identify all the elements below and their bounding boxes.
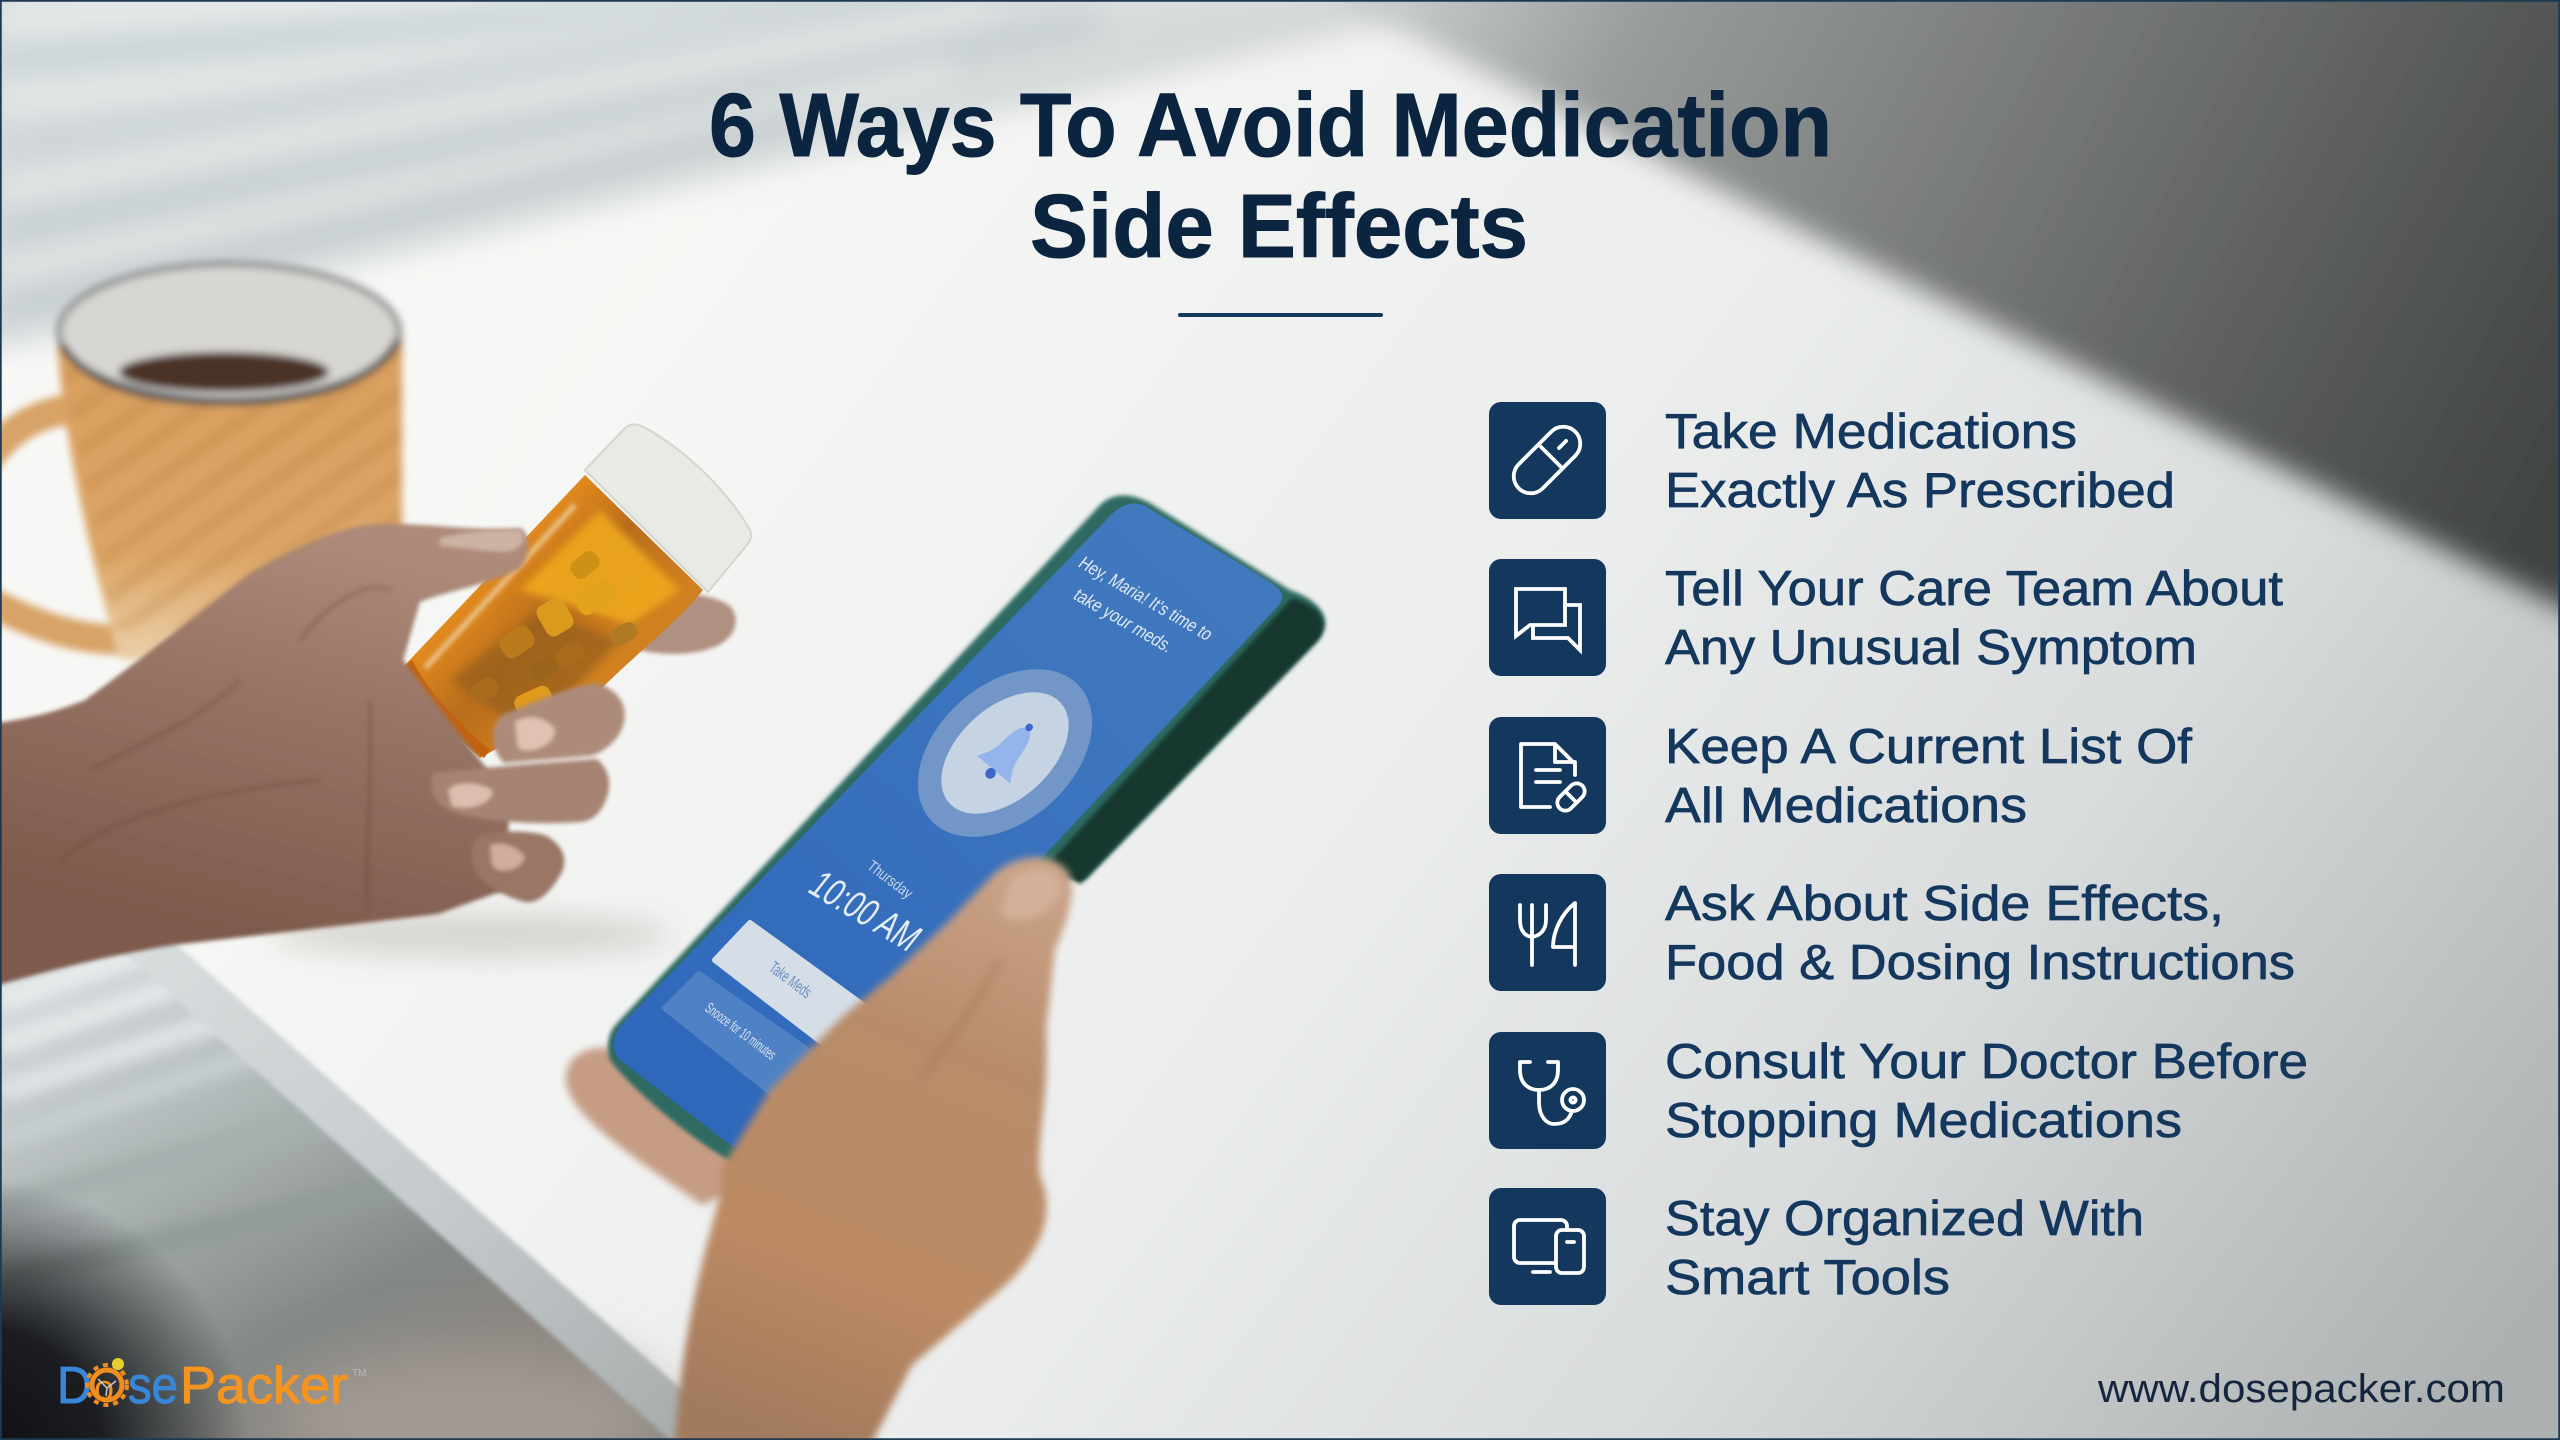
photo: right hand holding phone <box>674 857 1072 1440</box>
logo: DosePacker: Packer <box>180 1357 348 1415</box>
list item 5: consult your doctor <box>1489 1032 2308 1149</box>
snooze button <box>665 974 813 1095</box>
phone dark side <box>1050 598 1323 884</box>
snooze button: Snooze for 10 minutes <box>702 1000 779 1064</box>
item text: Stay Organized With <box>1665 1192 2144 1246</box>
logo: DosePacker: TM <box>352 1368 366 1379</box>
list item 6: stay organized <box>1489 1188 2144 1305</box>
icon: stethoscope <box>1489 1032 1606 1149</box>
icon: capsule <box>1489 402 1606 519</box>
take meds button <box>715 923 867 1047</box>
icon: document with pill <box>1489 717 1606 834</box>
icon: chat bubbles <box>1489 559 1606 676</box>
item text <box>1665 1035 2308 1148</box>
logo: DosePacker: se <box>128 1357 178 1415</box>
bell alert circle <box>885 636 1125 870</box>
bell icon <box>970 710 1048 792</box>
pill bottle body <box>403 475 703 758</box>
title: Side Effects <box>1030 177 1528 277</box>
list item 3: keep a current list <box>1489 717 2192 834</box>
item text <box>1665 720 2192 833</box>
item text: Take Medications <box>1665 405 2077 459</box>
pill bottle cap <box>585 424 751 592</box>
item text: Food & Dosing Instructions <box>1665 936 2295 990</box>
curled fingers <box>431 530 625 902</box>
item text: Exactly As Prescribed <box>1665 464 2175 518</box>
website url: www.dosepacker.com <box>2097 1367 2505 1411</box>
item text: Any Unusual Symptom <box>1665 621 2197 675</box>
screen day label: Thursday <box>864 858 916 902</box>
photo: smartphone with reminder app <box>608 495 1325 1165</box>
photo: coffee mug <box>0 264 410 660</box>
list item 1: take medications <box>1489 402 2175 519</box>
phone body <box>608 495 1325 1165</box>
background: below table with blind reflections, bottom left <box>2 954 679 1438</box>
finger behind bottle <box>630 594 736 654</box>
item text: Ask About Side Effects, <box>1665 877 2224 931</box>
logo gear with clock: o <box>94 1367 114 1408</box>
mug front rim <box>62 340 398 402</box>
background: dark wall, top right <box>1340 0 2560 640</box>
table front edge <box>115 943 745 1440</box>
item text <box>1665 1192 2144 1305</box>
icon: fork and knife <box>1489 874 1606 991</box>
hand and thumb <box>674 857 1072 1440</box>
screen reminder message: Hey, Maria! It's time to <box>1074 553 1217 645</box>
hand palm and index finger <box>0 524 528 990</box>
mug body <box>50 330 410 660</box>
photo: left hand holding pill bottle <box>0 424 751 990</box>
creases on the palm <box>60 587 390 910</box>
screen time: 10:00 AM <box>800 864 930 959</box>
title <box>709 76 1832 277</box>
coffee surface <box>119 352 329 392</box>
item text <box>1665 562 2283 675</box>
item text: Consult Your Doctor Before <box>1665 1035 2308 1089</box>
logo: DosePacker <box>57 1357 366 1415</box>
item text: Tell Your Care Team About <box>1665 562 2283 616</box>
item text: Smart Tools <box>1665 1251 1950 1305</box>
title divider <box>1178 313 1383 317</box>
screen reminder message: take your meds. <box>1069 585 1177 657</box>
background: blurred window-blind wall, top left <box>2 2 1383 358</box>
take meds button: Take Meds <box>766 958 815 1002</box>
logo: DosePacker: D <box>57 1357 92 1415</box>
item text <box>1665 405 2175 518</box>
list item 4: ask about side effects <box>1489 874 2295 991</box>
phone screen <box>614 503 1282 1160</box>
item text: Stopping Medications <box>1665 1094 2182 1148</box>
mug interior <box>59 264 399 400</box>
item text: Keep A Current List Of <box>1665 720 2192 774</box>
icon: monitor and phone <box>1489 1188 1606 1305</box>
item text: All Medications <box>1665 779 2027 833</box>
item text <box>1665 877 2295 990</box>
shadow of hand on the table <box>270 913 670 957</box>
list item 2: tell your care team <box>1489 559 2283 676</box>
logo gear with clock <box>87 1358 127 1408</box>
title: 6 Ways To Avoid Medication <box>709 76 1832 176</box>
mug handle <box>0 408 125 640</box>
photo: finger under phone <box>566 1048 760 1205</box>
